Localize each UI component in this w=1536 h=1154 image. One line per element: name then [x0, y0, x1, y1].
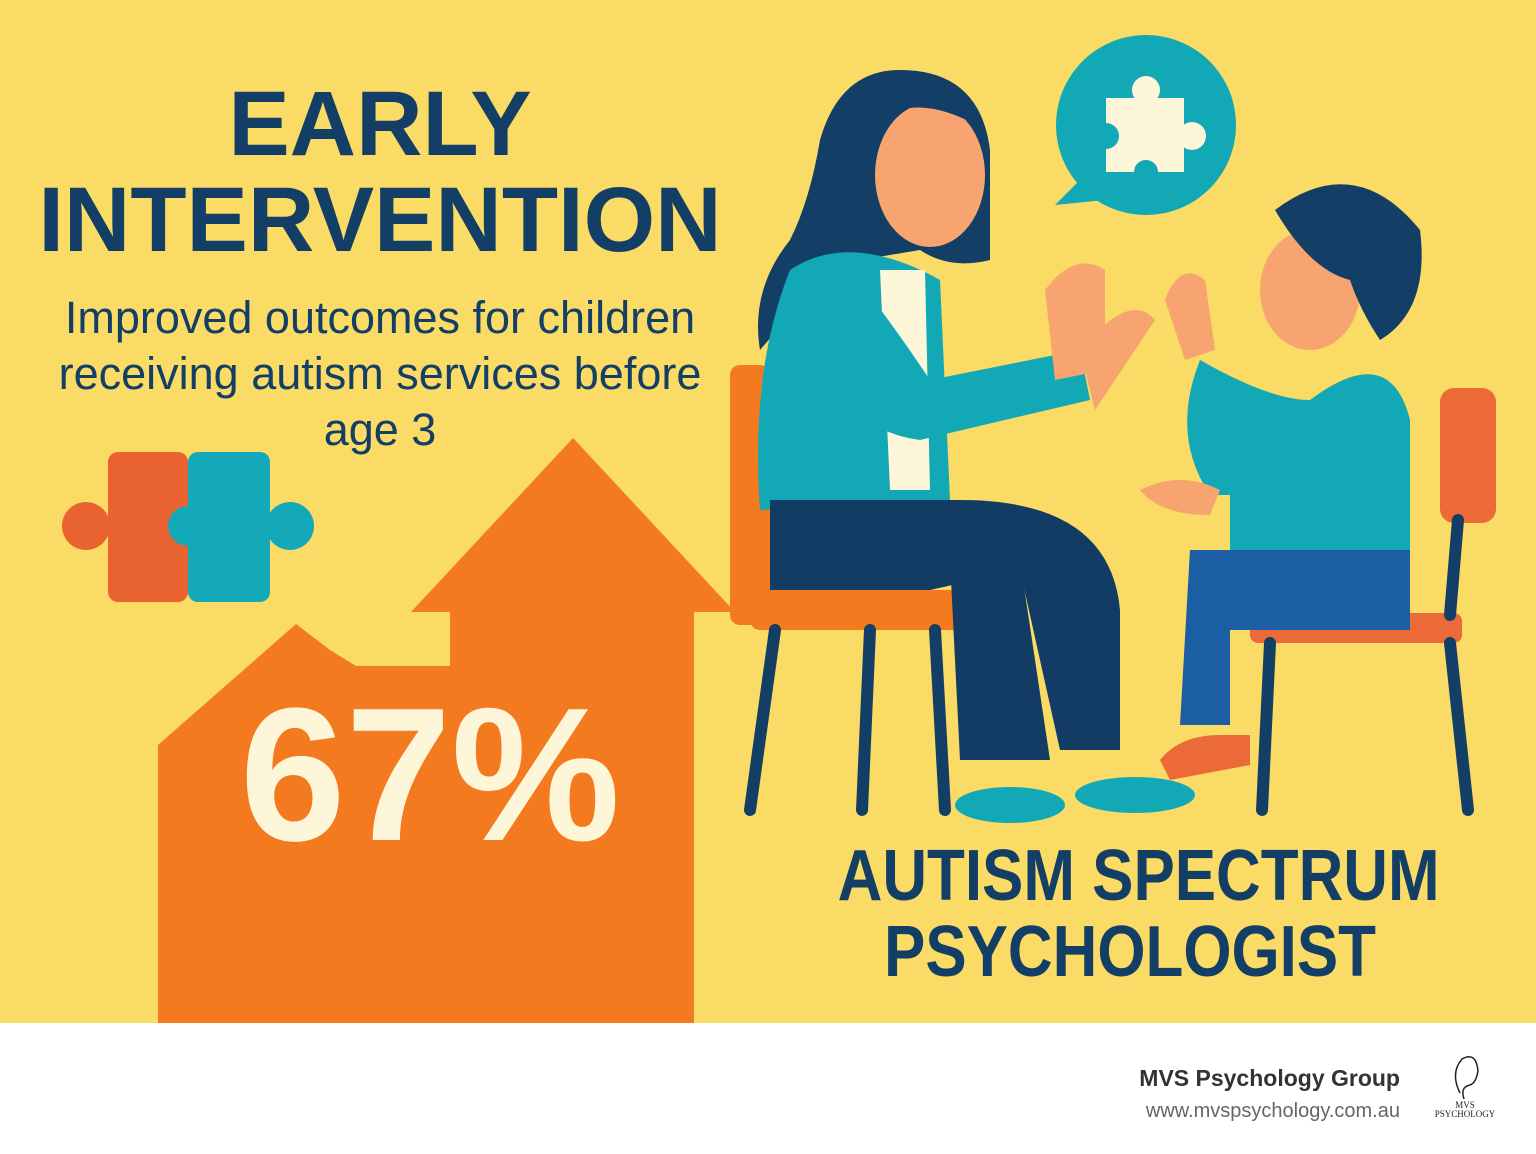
child — [1140, 184, 1422, 780]
caption: PSYCHOLOGIST — [884, 912, 1376, 992]
icon: puzzle pieces — [62, 452, 314, 602]
caption — [838, 836, 1440, 992]
woman's chair — [730, 365, 975, 810]
footer — [0, 1023, 1536, 1154]
title — [38, 73, 722, 271]
logo: PSYCHOLOGY — [1435, 1109, 1495, 1119]
logo: MVS — [1455, 1100, 1475, 1110]
caption: AUTISM SPECTRUM — [838, 836, 1440, 916]
child's chair — [1250, 388, 1496, 810]
arrow — [158, 438, 735, 1023]
woman — [758, 70, 1195, 823]
speech bubble with puzzle — [1055, 35, 1236, 215]
statistic: 67% — [240, 669, 620, 881]
logo — [1435, 1056, 1495, 1119]
title: INTERVENTION — [38, 169, 722, 271]
brand text: MVS Psychology Group — [1139, 1065, 1400, 1091]
brand text — [1139, 1065, 1400, 1122]
brand text: www.mvspsychology.com.au — [1146, 1100, 1400, 1122]
title: EARLY — [228, 73, 532, 175]
subtitle: Improved outcomes for children receiving autism services before age 3 — [59, 292, 701, 455]
